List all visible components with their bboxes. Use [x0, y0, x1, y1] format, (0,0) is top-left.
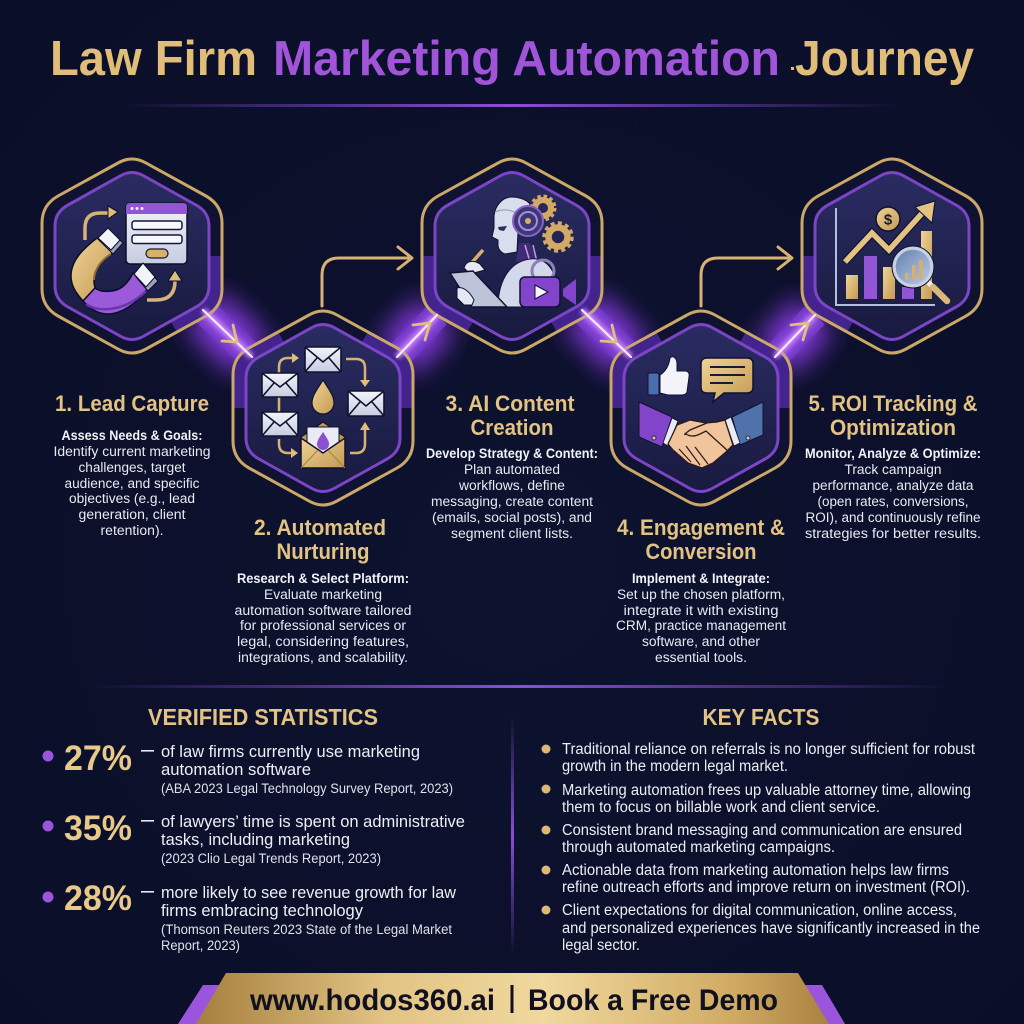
heading: verified statistics: VERIFIED STATISTICS — [148, 704, 378, 730]
step 2 text: Research & Select Platform: — [237, 571, 409, 586]
icon: robot with tablet and video — [450, 196, 576, 307]
fact 5: and personalized experiences have significantly increased in the — [562, 920, 980, 937]
step 3 text: segment client lists. — [451, 526, 573, 541]
stat: 27 percent: 27% — [64, 739, 132, 778]
fact 5: Client expectations for digital communication, online access, — [562, 902, 957, 919]
step 3 text: Plan automated — [464, 462, 560, 477]
stat: 35 percent — [42, 809, 465, 866]
stat: 28 percent: more likely to see revenue growth for law — [161, 883, 457, 902]
stat: 35 percent: 35% — [64, 809, 132, 848]
fact 3: through automated marketing campaigns. — [562, 839, 835, 856]
step 5 text: Track campaign — [844, 462, 942, 477]
step 2 text — [234, 515, 412, 665]
stat: 28 percent: 28% — [64, 879, 132, 918]
title: purple words: Marketing Automation — [273, 32, 780, 86]
banner text: Book a Free Demo — [528, 984, 778, 1017]
fact 4: refine outreach efforts and improve return on investment (ROI). — [562, 879, 970, 896]
fact 5 — [542, 902, 980, 954]
connectors between hexagons — [203, 310, 815, 357]
step 5 text: performance, analyze data — [812, 478, 974, 493]
fact 3: Consistent brand messaging and communication are ensured — [562, 822, 962, 839]
fact 2 — [542, 782, 971, 816]
fact 4: Actionable data from marketing automation helps law firms — [562, 862, 949, 879]
stat: 28 percent: firms embracing technology — [161, 901, 363, 920]
fact 2: them to focus on billable work and client service. — [562, 799, 880, 816]
step 4 text: essential tools. — [655, 650, 747, 665]
step 5 text: Monitor, Analyze & Optimize: — [805, 446, 981, 461]
stat: 35 percent: (2023 Clio Legal Trends Report, 2023) — [161, 851, 381, 866]
stat: 28 percent — [42, 879, 457, 953]
step 5 text: Optimization — [830, 415, 956, 440]
fact 1 — [542, 741, 976, 775]
fact 1: growth in the modern legal market. — [562, 758, 788, 775]
hexagon 5: roi tracking — [802, 159, 982, 353]
hexagon 1: lead capture — [42, 159, 222, 353]
step 2 text: legal, considering features, — [237, 634, 409, 649]
step 2 text: automation software tailored — [234, 603, 412, 618]
icon: growth chart with magnifier — [836, 201, 947, 305]
step 4 text: CRM, practice management — [616, 618, 786, 633]
step 5 text: 5. ROI Tracking & — [808, 391, 978, 416]
step 5 text: strategies for better results. — [805, 526, 981, 541]
hexagon 3: ai content creation — [422, 159, 602, 353]
fact 4 — [542, 862, 970, 896]
stat: 27 percent — [42, 739, 453, 796]
step 4 text: Implement & Integrate: — [632, 571, 770, 586]
call to action banner — [178, 973, 845, 1024]
step 2 text: Evaluate marketing — [264, 587, 382, 602]
step 1 text: retention). — [100, 523, 164, 538]
stat: 35 percent: of lawyers’ time is spent on administrative — [161, 812, 465, 831]
step 4 text: Set up the chosen platform, — [617, 587, 785, 602]
step 3 text — [426, 391, 598, 541]
step 3 text: Creation — [470, 415, 554, 440]
step 3 text: 3. AI Content — [446, 391, 575, 416]
banner text — [249, 984, 778, 1017]
panel: verified statistics — [42, 704, 465, 953]
heading: key facts: KEY FACTS — [702, 704, 820, 730]
step 4 text: Conversion — [646, 539, 756, 564]
step 4 text: 4. Engagement & — [617, 515, 785, 540]
panel: key facts — [542, 704, 980, 954]
step 2 text: integrations, and scalability. — [238, 650, 408, 665]
step 3 text: Develop Strategy & Content: — [426, 446, 598, 461]
stat: 27 percent: automation software — [161, 760, 311, 779]
step 3 text: messaging, create content — [431, 494, 593, 509]
icon: growth chart with magnifier: $ — [884, 212, 893, 228]
step 1 text: Assess Needs & Goals: — [62, 428, 202, 443]
elbow arrow: step 4 to step 5 — [701, 247, 792, 306]
stat: 28 percent: (Thomson Reuters 2023 State of the Legal Market — [161, 922, 452, 937]
fact 3 — [542, 822, 962, 856]
step 1 text: objectives (e.g., lead — [69, 491, 195, 506]
hexagon 4: engagement and conversion — [611, 311, 791, 505]
icon: email loop — [262, 347, 384, 468]
step 5 text: (open rates, conversions, — [818, 494, 968, 509]
step 4 text: software, and other — [642, 634, 761, 649]
hexagon 2: automated nurturing — [233, 311, 413, 505]
step 3 text: workflows, define — [458, 478, 565, 493]
step 4 text — [616, 515, 786, 665]
step 5 text — [805, 391, 981, 541]
icon: magnet and form — [71, 203, 187, 314]
step 2 text: 2. Automated — [254, 515, 386, 540]
step 3 text: (emails, social posts), and — [432, 510, 592, 525]
stat: 35 percent: tasks, including marketing — [161, 830, 350, 849]
step 1 text: generation, client — [78, 507, 186, 522]
step 1 text: challenges, target — [78, 460, 186, 475]
step 2 text: for professional services or — [240, 618, 407, 633]
stat: 28 percent: Report, 2023) — [161, 938, 240, 953]
stat: 27 percent: of law firms currently use marketing — [161, 742, 420, 761]
step 4 text: integrate it with existing — [624, 603, 778, 618]
title: final word: Journey — [795, 32, 974, 86]
fact 5: legal sector. — [562, 937, 640, 954]
fact 2: Marketing automation frees up valuable attorney time, allowing — [562, 782, 971, 799]
stat: 27 percent: (ABA 2023 Legal Technology Survey Report, 2023) — [161, 781, 453, 796]
step 1 text: Identify current marketing — [54, 444, 210, 459]
title: Law Firm — [50, 32, 257, 86]
step 1 text: audience, and specific — [64, 476, 200, 491]
glowing connector highlights with arrowheads — [203, 310, 815, 357]
step 2 text: Nurturing — [276, 539, 370, 564]
elbow arrow: step 2 to step 3 — [322, 247, 412, 306]
step 1 text — [54, 391, 210, 538]
banner text: www.hodos360.ai — [249, 984, 495, 1017]
step 5 text: ROI), and continuously refine — [806, 510, 980, 525]
icon: thumbs up, speech bubble, handshake — [639, 357, 763, 468]
step 1 text: 1. Lead Capture — [55, 391, 209, 416]
fact 1: Traditional reliance on referrals is no longer sufficient for robust — [562, 741, 976, 758]
